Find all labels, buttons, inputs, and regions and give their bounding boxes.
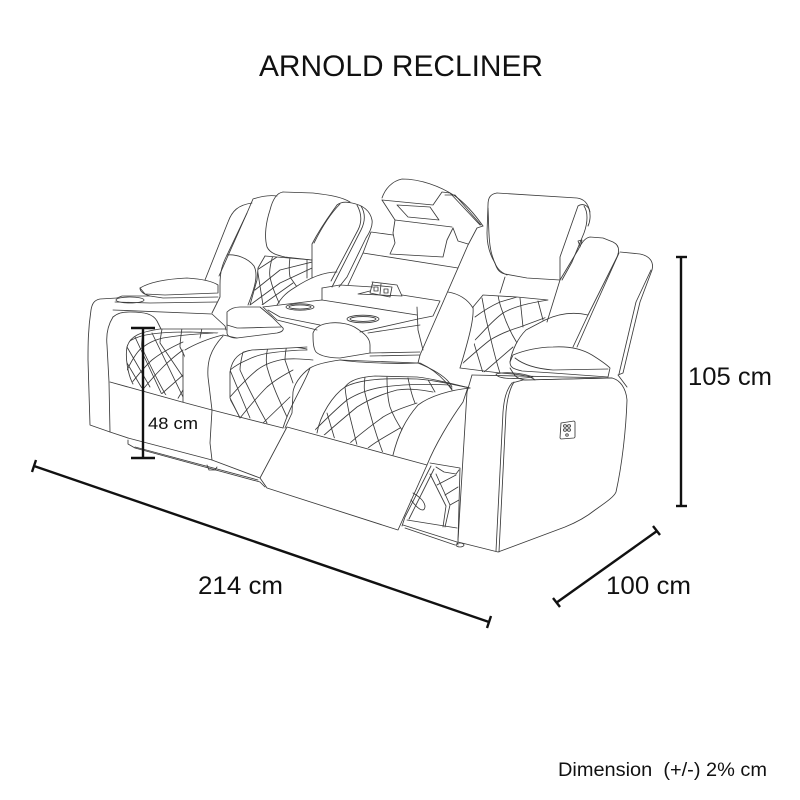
centre divider pillar <box>418 226 483 387</box>
rear quilted panel <box>250 255 312 305</box>
dimension: width 214 cm <box>32 460 491 628</box>
front seat quilt <box>315 377 452 453</box>
seat front rail <box>110 382 283 428</box>
cup holders <box>286 304 379 323</box>
right armrest cushion <box>510 347 612 380</box>
middle seat quilt <box>230 343 313 428</box>
label: 100 cm: 100 cm <box>606 572 691 600</box>
left seat quilt <box>127 328 218 400</box>
label: 105 cm: 105 cm <box>688 363 772 391</box>
dimension: seat height 48 cm <box>131 328 155 458</box>
left armrest cushion <box>140 278 218 298</box>
icon: power switch <box>560 421 575 439</box>
console top <box>263 285 440 363</box>
left front base <box>128 438 265 487</box>
label: 48 cm: 48 cm <box>148 414 198 433</box>
right headrest <box>487 193 590 293</box>
icon: USB power outlet <box>358 282 402 297</box>
mechanism <box>402 463 464 547</box>
footrest <box>260 427 427 530</box>
middle left armrest <box>227 307 283 338</box>
left headrest and wing <box>266 192 372 287</box>
sofa line drawing <box>88 179 652 552</box>
right rear quilt <box>463 295 548 373</box>
dimension: height 105 cm <box>676 257 687 506</box>
title: ARNOLD RECLINER <box>259 50 543 83</box>
front wing cushion <box>283 360 452 428</box>
dimension: depth 100 cm <box>553 526 660 607</box>
footnote: Dimension (+/-) 2% cm <box>558 760 767 781</box>
rear console panels <box>348 232 458 285</box>
right backrest <box>545 237 652 387</box>
label: 214 cm: 214 cm <box>198 572 283 600</box>
left backrest <box>205 196 277 313</box>
middle right armrest <box>313 323 370 358</box>
right arm <box>458 373 627 552</box>
flip-up head unit <box>382 179 483 257</box>
left arm <box>88 296 226 438</box>
